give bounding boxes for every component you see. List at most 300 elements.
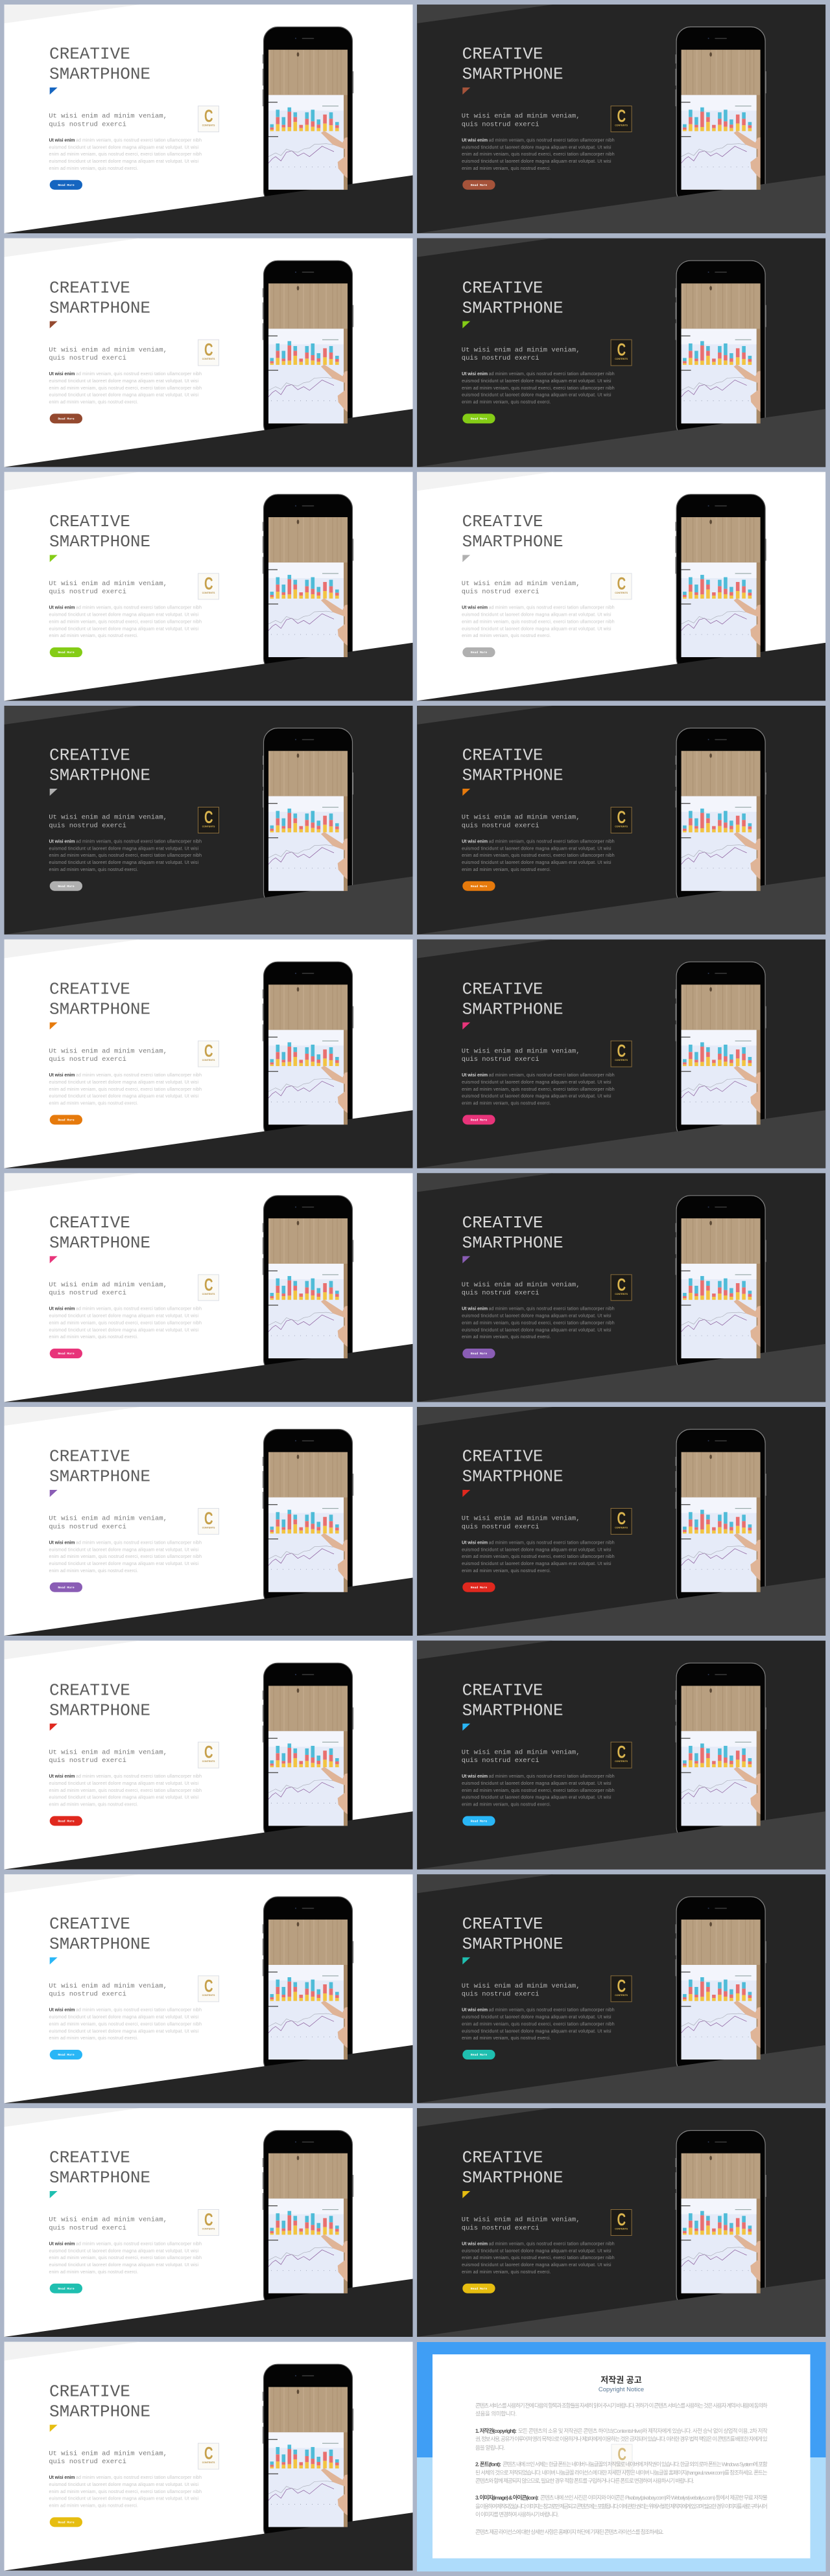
phone screen [682, 984, 761, 1124]
logo [198, 1041, 219, 1067]
subtitle [49, 1047, 167, 1063]
phone screen [682, 1452, 761, 1592]
title: SMARTPHONE [462, 1700, 563, 1720]
body text: ad minim veniam, quis nostrud exerci tation ullamcorper nibh [76, 2242, 202, 2246]
subtitle: Ut wisi enim ad minim veniam, [49, 1047, 167, 1055]
title: CREATIVE [462, 979, 543, 999]
logo: CONTENTS [202, 1293, 215, 1295]
logo [198, 1976, 219, 2002]
subtitle: Ut wisi enim ad minim veniam, [462, 580, 580, 588]
slide background [417, 472, 825, 701]
title: SMARTPHONE [49, 999, 150, 1019]
body text: ad minim veniam, quis nostrud exerci tation ullamcorper nibh [489, 1073, 615, 1078]
body text: Ut wisi enim [462, 839, 488, 844]
logo: CONTENTS [202, 826, 215, 828]
button: Read More [471, 2287, 487, 2291]
title: CREATIVE [49, 278, 130, 297]
subtitle: quis nostrud exerci [49, 354, 126, 362]
button [50, 180, 82, 190]
logo: CONTENTS [615, 358, 628, 360]
button: Read More [471, 183, 487, 187]
button: Read More [58, 183, 75, 187]
logo [198, 1509, 219, 1535]
phone screen [268, 2153, 348, 2293]
body text: enim ad minim veniam, quis nostrud exerci, exerci tation ullamcorper nibh [49, 853, 202, 858]
slide background [4, 1173, 412, 1402]
slide 16: dark sky blue [417, 1641, 825, 1870]
clause 2: 된 서체의 것으로 저작되었습니다. 네이버 나눔글꼴 라이선스에 대한 자세한 사항은 네이버 나눔글꼴 홈페이지(hangeul.naver.com)를 참조하세요. 폰트는 [475, 2469, 768, 2476]
logo: CONTENTS [202, 1527, 215, 1529]
clause 3: 이 이미지를 변경하여 사용하시기 바랍니다. [475, 2511, 559, 2518]
subtitle: quis nostrud exerci [49, 2224, 126, 2232]
body text: enim ad minim veniam, quis nostrud exerci, exerci tation ullamcorper nibh [49, 1789, 202, 1793]
body text: enim ad minim veniam, quis nostrud exerci, exerci tation ullamcorper nibh [462, 152, 615, 157]
button: Read More [58, 651, 75, 655]
button: Read More [58, 885, 75, 888]
logo: CONTENTS [615, 1293, 628, 1295]
logo: C [204, 1275, 213, 1294]
body text: enim ad minim veniam, quis nostrud exerci, exerci tation ullamcorper nibh [462, 386, 615, 391]
body text: euismod tincidunt ut laoreet dolore magna aliquam erat volutpat. Ut wisi [49, 1095, 198, 1099]
title [49, 746, 150, 785]
phone screen [682, 1920, 761, 2060]
phone screen [268, 751, 348, 891]
diagonal band [417, 2045, 825, 2103]
logo: C [204, 807, 213, 827]
button [462, 1583, 495, 1592]
title [462, 1213, 563, 1253]
logo: CONTENTS [615, 826, 628, 828]
logo: C [617, 2210, 626, 2229]
subtitle: Ut wisi enim ad minim veniam, [462, 113, 580, 121]
body text: Ut wisi enim [49, 1540, 75, 1545]
slide 2: dark brown [417, 5, 825, 233]
slide 3: light brown [4, 238, 412, 467]
body text: Ut wisi enim [49, 2008, 75, 2013]
body text [49, 839, 202, 872]
body text [462, 372, 615, 404]
title: SMARTPHONE [462, 1233, 563, 1253]
body text: enim ad minim veniam, quis nostrud exerci. [49, 400, 138, 404]
title [49, 1914, 150, 1954]
button: Read More [471, 1352, 487, 1356]
slide background [417, 940, 825, 1168]
logo: CONTENTS [202, 2228, 215, 2231]
clause 1: 1. 저작권(copyright): [475, 2428, 517, 2434]
logo: C [617, 106, 626, 126]
logo: C [204, 1041, 213, 1061]
slide background [417, 1173, 825, 1402]
body text: enim ad minim veniam, quis nostrud exerci, exerci tation ullamcorper nibh [462, 1087, 615, 1092]
body text: ad minim veniam, quis nostrud exerci tation ullamcorper nibh [489, 2008, 615, 2013]
slide 15: light red [4, 1641, 412, 1870]
body text: euismod tincidunt ut laoreet dolore magna aliquam erat volutpat. Ut wisi [49, 2263, 198, 2268]
logo: C [617, 574, 626, 593]
title: SMARTPHONE [49, 532, 150, 551]
title: SMARTPHONE [462, 532, 563, 551]
body text: enim ad minim veniam, quis nostrud exerci. [49, 167, 138, 171]
button: Read More [471, 651, 487, 655]
title [462, 1680, 563, 1720]
body text: enim ad minim veniam, quis nostrud exerci. [49, 1802, 138, 1807]
title: CREATIVE [49, 746, 130, 765]
subtitle: quis nostrud exerci [49, 121, 126, 128]
diagonal band [4, 876, 412, 934]
button [462, 881, 495, 891]
logo: CONTENTS [202, 1760, 215, 1763]
body text: euismod tincidunt ut laoreet dolore magna aliquam erat volutpat. Ut wisi [49, 2029, 198, 2034]
body text: euismod tincidunt ut laoreet dolore magna aliquam erat volutpat. Ut wisi [462, 2249, 611, 2253]
body text: enim ad minim veniam, quis nostrud exerci. [462, 1802, 551, 1807]
slide background [4, 472, 412, 701]
subtitle: Ut wisi enim ad minim veniam, [49, 814, 167, 822]
corner shape [4, 940, 140, 958]
subtitle: Ut wisi enim ad minim veniam, [462, 1748, 580, 1756]
title: SMARTPHONE [49, 2402, 150, 2421]
body text: enim ad minim veniam, quis nostrud exerci. [462, 634, 551, 638]
slide background [417, 238, 825, 467]
button [50, 1115, 82, 1124]
subtitle [49, 113, 167, 128]
title [49, 2382, 150, 2421]
accent triangle [462, 2191, 470, 2198]
body text: euismod tincidunt ut laoreet dolore magna aliquam erat volutpat. Ut wisi [462, 1328, 611, 1332]
title: CREATIVE [462, 746, 543, 765]
slide background [417, 5, 825, 233]
title: CREATIVE [462, 512, 543, 531]
body text: euismod tincidunt ut laoreet dolore magna aliquam erat volutpat. Ut wisi [462, 2263, 611, 2268]
subtitle [462, 2216, 580, 2232]
logo: C [204, 1976, 213, 1995]
phone screen [268, 1452, 348, 1592]
button [50, 1349, 82, 1358]
body text: ad minim veniam, quis nostrud exerci tation ullamcorper nibh [489, 2242, 615, 2246]
body text: enim ad minim veniam, quis nostrud exerci. [462, 1335, 551, 1340]
phone screen [268, 50, 348, 190]
subtitle: quis nostrud exerci [49, 1757, 126, 1765]
corner shape [417, 1173, 553, 1192]
body text: enim ad minim veniam, quis nostrud exerci. [49, 2036, 138, 2041]
body text: euismod tincidunt ut laoreet dolore magna aliquam erat volutpat. Ut wisi [49, 1796, 198, 1800]
accent triangle [50, 2425, 58, 2432]
title: SMARTPHONE [49, 1233, 150, 1253]
subtitle: Ut wisi enim ad minim veniam, [462, 814, 580, 822]
corner shape [4, 472, 140, 491]
title: CREATIVE [462, 1213, 543, 1233]
body text: enim ad minim veniam, quis nostrud exerci. [462, 2036, 551, 2041]
body text: Ut wisi enim [49, 1073, 75, 1078]
accent triangle [462, 789, 470, 796]
body text [462, 839, 615, 872]
clause 2: 2. 폰트(font): [475, 2461, 501, 2468]
body text: euismod tincidunt ut laoreet dolore magna aliquam erat volutpat. Ut wisi [49, 2015, 198, 2020]
logo: C [617, 807, 626, 827]
title: CREATIVE [462, 278, 543, 297]
body text [49, 2242, 202, 2275]
title: SMARTPHONE [49, 766, 150, 785]
title [462, 746, 563, 785]
body text: euismod tincidunt ut laoreet dolore magna aliquam erat volutpat. Ut wisi [49, 159, 198, 164]
body text: enim ad minim veniam, quis nostrud exerci. [462, 167, 551, 171]
logo: CONTENTS [202, 2461, 215, 2464]
title: CREATIVE [462, 1914, 543, 1934]
body text: euismod tincidunt ut laoreet dolore magna aliquam erat volutpat. Ut wisi [49, 1548, 198, 1552]
phone body [676, 2131, 766, 2308]
title [49, 1213, 150, 1253]
body text: ad minim veniam, quis nostrud exerci tation ullamcorper nibh [76, 1540, 202, 1545]
body text: euismod tincidunt ut laoreet dolore magna aliquam erat volutpat. Ut wisi [49, 861, 198, 865]
diagonal band [4, 643, 412, 701]
body text: Ut wisi enim [462, 1540, 488, 1545]
accent triangle [462, 87, 470, 95]
logo [198, 2443, 219, 2469]
title: SMARTPHONE [462, 999, 563, 1019]
accent triangle [462, 1256, 470, 1263]
logo [611, 1041, 632, 1067]
watermark logo: C [617, 2444, 626, 2464]
body text: ad minim veniam, quis nostrud exerci tation ullamcorper nibh [489, 372, 615, 377]
slide 21: light yellow [4, 2342, 412, 2571]
body text: Ut wisi enim [49, 2242, 75, 2246]
subtitle: Ut wisi enim ad minim veniam, [49, 346, 167, 354]
slide 19: light teal [4, 2108, 412, 2337]
body text [462, 2008, 615, 2041]
subtitle: quis nostrud exerci [462, 1991, 540, 1999]
button: Read More [471, 1819, 487, 1823]
white card [433, 2354, 811, 2559]
slide 7: dark gray [4, 706, 412, 934]
logo: C [617, 1275, 626, 1294]
body text: euismod tincidunt ut laoreet dolore magna aliquam erat volutpat. Ut wisi [49, 2497, 198, 2501]
diagonal band [417, 643, 825, 701]
title: CREATIVE [49, 2382, 130, 2401]
button: Read More [58, 1352, 75, 1356]
body text: enim ad minim veniam, quis nostrud exerci, exerci tation ullamcorper nibh [462, 853, 615, 858]
title [49, 512, 150, 551]
body text: enim ad minim veniam, quis nostrud exerci, exerci tation ullamcorper nibh [49, 1555, 202, 1559]
clause 3: 콘텐츠 내에 쓰인 사진은 이미지와 아이콘은 Pixabay(pixabay.com)와 Webalys(webalys.com) 등에서 제공한 무료 저작물 [540, 2494, 768, 2501]
body text: Ut wisi enim [49, 138, 75, 143]
copyright subheading: Copyright Notice [599, 2386, 644, 2393]
phone body [676, 494, 766, 673]
phone body [263, 962, 353, 1140]
clause 1 [475, 2428, 768, 2451]
body text: enim ad minim veniam, quis nostrud exerci, exerci tation ullamcorper nibh [462, 1789, 615, 1793]
button: Read More [471, 885, 487, 888]
subtitle: quis nostrud exerci [49, 1290, 126, 1297]
slide background [417, 1874, 825, 2103]
body text: enim ad minim veniam, quis nostrud exerci, exerci tation ullamcorper nibh [49, 2256, 202, 2260]
phone body [676, 1430, 766, 1607]
corner shape [417, 706, 553, 725]
body text: Ut wisi enim [462, 606, 488, 610]
title [49, 1447, 150, 1487]
body text: euismod tincidunt ut laoreet dolore magna aliquam erat volutpat. Ut wisi [49, 846, 198, 851]
slide 17: light sky blue [4, 1874, 412, 2103]
corner shape [4, 2342, 140, 2361]
logo: CONTENTS [202, 592, 215, 594]
body text: Ut wisi enim [49, 606, 75, 610]
button: Read More [471, 1118, 487, 1122]
logo [198, 1275, 219, 1301]
title [462, 1447, 563, 1487]
diagonal band [4, 1811, 412, 1870]
logo: C [617, 1743, 626, 1762]
diagonal band [417, 1811, 825, 1870]
subtitle: Ut wisi enim ad minim veniam, [49, 580, 167, 588]
body text [49, 372, 202, 404]
phone body [676, 261, 766, 439]
logo: CONTENTS [615, 124, 628, 127]
subtitle [49, 1982, 167, 1999]
subtitle: quis nostrud exerci [49, 822, 126, 830]
corner shape [417, 1874, 553, 1893]
body text: euismod tincidunt ut laoreet dolore magna aliquam erat volutpat. Ut wisi [49, 2483, 198, 2487]
button: Read More [58, 2520, 75, 2524]
body text [462, 1540, 615, 1573]
subtitle: Ut wisi enim ad minim veniam, [462, 2216, 580, 2224]
title [462, 979, 563, 1019]
body text: enim ad minim veniam, quis nostrud exerci, exerci tation ullamcorper nibh [49, 1321, 202, 1325]
body text: enim ad minim veniam, quis nostrud exerci. [49, 2270, 138, 2275]
slide 14: dark red [417, 1407, 825, 1636]
body text: ad minim veniam, quis nostrud exerci tation ullamcorper nibh [76, 1307, 202, 1312]
accent triangle [50, 555, 58, 562]
body text: enim ad minim veniam, quis nostrud exerci, exerci tation ullamcorper nibh [462, 2022, 615, 2026]
body text [49, 1540, 202, 1573]
title: SMARTPHONE [49, 1700, 150, 1720]
phone body [676, 1897, 766, 2075]
logo [611, 574, 632, 599]
phone body [676, 962, 766, 1140]
slide background [4, 706, 412, 934]
corner shape [417, 2108, 553, 2127]
corner shape [417, 472, 553, 491]
body text: enim ad minim veniam, quis nostrud exerci, exerci tation ullamcorper nibh [49, 386, 202, 391]
accent triangle [50, 1724, 58, 1731]
body text [49, 2476, 202, 2508]
body text [49, 138, 202, 171]
title [49, 1680, 150, 1720]
body text: enim ad minim veniam, quis nostrud exerci, exerci tation ullamcorper nibh [49, 2490, 202, 2494]
corner shape [417, 238, 553, 257]
button [50, 2284, 82, 2293]
subtitle: Ut wisi enim ad minim veniam, [49, 1515, 167, 1523]
body text: enim ad minim veniam, quis nostrud exerci, exerci tation ullamcorper nibh [462, 2256, 615, 2260]
slide background [4, 1407, 412, 1636]
logo: CONTENTS [202, 1059, 215, 1062]
button: Read More [471, 417, 487, 421]
slide background [4, 2108, 412, 2337]
body text: enim ad minim veniam, quis nostrud exerci. [462, 400, 551, 404]
diagonal band [417, 1110, 825, 1168]
diagonal band [4, 1110, 412, 1168]
slide background [4, 238, 412, 467]
corner shape [417, 1407, 553, 1426]
title: SMARTPHONE [462, 65, 563, 84]
body text: Ut wisi enim [49, 1307, 75, 1312]
diagonal band [4, 409, 412, 467]
logo: C [617, 1976, 626, 1995]
title: CREATIVE [49, 1447, 130, 1467]
clause 3 [475, 2494, 768, 2518]
body text: enim ad minim veniam, quis nostrud exerci. [462, 1101, 551, 1106]
title [49, 278, 150, 318]
diagonal band [417, 409, 825, 467]
diagonal band [417, 2279, 825, 2337]
logo: C [204, 2444, 213, 2463]
title [462, 45, 563, 84]
phone screen [268, 1920, 348, 2060]
body text: euismod tincidunt ut laoreet dolore magna aliquam erat volutpat. Ut wisi [49, 379, 198, 384]
logo [611, 106, 632, 132]
body text: Ut wisi enim [462, 138, 488, 143]
subtitle: quis nostrud exerci [49, 1991, 126, 1999]
intro paragraph [475, 2402, 768, 2417]
button [50, 2050, 82, 2060]
phone body [263, 728, 353, 906]
body text: enim ad minim veniam, quis nostrud exerci, exerci tation ullamcorper nibh [49, 2022, 202, 2026]
phone body [263, 1663, 353, 1841]
logo: CONTENTS [202, 124, 215, 127]
body text: ad minim veniam, quis nostrud exerci tation ullamcorper nibh [489, 1774, 615, 1779]
accent triangle [462, 321, 470, 329]
body text: euismod tincidunt ut laoreet dolore magna aliquam erat volutpat. Ut wisi [49, 145, 198, 150]
body text: euismod tincidunt ut laoreet dolore magna aliquam erat volutpat. Ut wisi [49, 1080, 198, 1085]
body text: enim ad minim veniam, quis nostrud exerci. [49, 1569, 138, 1573]
logo: C [204, 2210, 213, 2229]
button: Read More [58, 2053, 75, 2057]
diagonal band [417, 1577, 825, 1636]
slide 9: light orange [4, 940, 412, 1168]
accent triangle [50, 87, 58, 95]
corner shape [4, 706, 140, 725]
logo [611, 1275, 632, 1301]
subtitle [49, 346, 167, 362]
body text: Ut wisi enim [462, 1073, 488, 1078]
body text: enim ad minim veniam, quis nostrud exerci, exerci tation ullamcorper nibh [49, 620, 202, 624]
logo: CONTENTS [202, 1994, 215, 1997]
phone screen [682, 50, 761, 190]
subtitle [49, 814, 167, 830]
subtitle: Ut wisi enim ad minim veniam, [49, 1748, 167, 1756]
title: CREATIVE [49, 512, 130, 531]
title [49, 2148, 150, 2188]
subtitle [462, 1281, 580, 1297]
intro paragraph: 셨음을 의미합니다. [475, 2411, 517, 2417]
button: Read More [58, 1118, 75, 1122]
corner shape [417, 1641, 553, 1660]
body text: ad minim veniam, quis nostrud exerci tation ullamcorper nibh [489, 1540, 615, 1545]
body text: euismod tincidunt ut laoreet dolore magna aliquam erat volutpat. Ut wisi [49, 2249, 198, 2253]
body text: Ut wisi enim [49, 372, 75, 377]
slide 18: dark teal [417, 1874, 825, 2103]
body text: euismod tincidunt ut laoreet dolore magna aliquam erat volutpat. Ut wisi [462, 393, 611, 398]
phone body [676, 728, 766, 906]
diagonal band [4, 1577, 412, 1636]
accent triangle [462, 1957, 470, 1964]
subtitle [49, 1281, 167, 1297]
phone body [263, 1196, 353, 1374]
logo [611, 340, 632, 366]
clause 3: 3. 이미지(image) & 아이콘(icon): [475, 2494, 539, 2501]
logo: C [204, 340, 213, 360]
body text: euismod tincidunt ut laoreet dolore magna aliquam erat volutpat. Ut wisi [462, 1796, 611, 1800]
body text [462, 2242, 615, 2275]
title: SMARTPHONE [462, 298, 563, 318]
upper blue background [417, 2342, 826, 2457]
closing line: 콘텐츠 제공 라이선스에 대한 상세한 사항은 홈페이지 하단에 기재된 콘텐츠 라이선스를 참조하세요. [475, 2529, 664, 2535]
